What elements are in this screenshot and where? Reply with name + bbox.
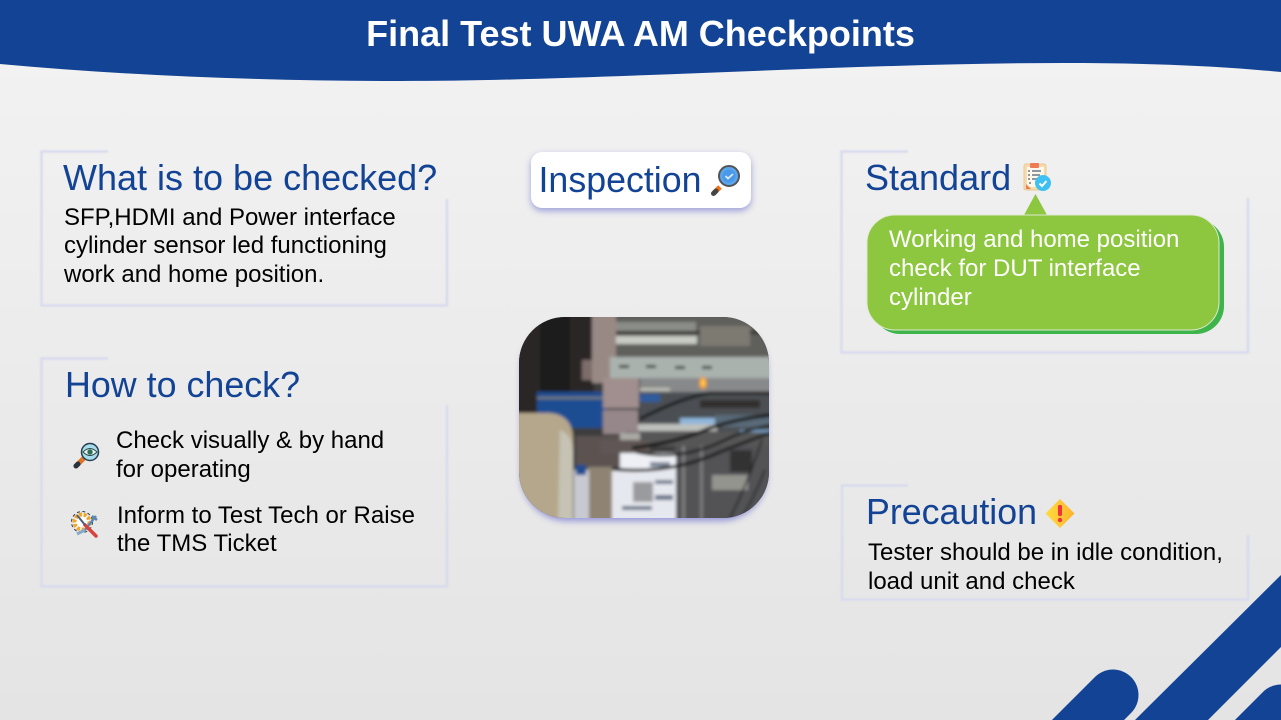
heading: inspection: Inspection: [538, 159, 702, 200]
callout: working and home position: Working and home position: [889, 226, 1179, 253]
text block: inform test tech: Inform to Test Tech or Raise: [117, 502, 415, 529]
photo: tester interface cylinder: [515, 313, 773, 522]
heading: precaution: Precaution: [866, 491, 1037, 532]
icon: clipboard check: [1024, 163, 1051, 191]
callout: working and home position: [867, 215, 1224, 334]
icon: inspection magnifier: [714, 166, 739, 194]
text block: check visually: for operating: [116, 456, 251, 483]
callout: working and home position: cylinder: [889, 284, 972, 311]
panel: precaution: [842, 486, 1248, 600]
panel: what is to be checked: [42, 152, 447, 306]
text block: check visually: Check visually & by hand: [116, 427, 384, 454]
text block: inform test tech: the TMS Ticket: [117, 530, 277, 557]
text block: precaution: Tester should be in idle condition,: [868, 539, 1223, 566]
text block: precaution: load unit and check: [868, 568, 1076, 595]
panel: inspection label: [531, 152, 751, 211]
icon: gear and tools: [72, 512, 97, 536]
heading: standard: Standard: [865, 157, 1011, 198]
text block: what is to be checked: SFP,HDMI and Power interface: [64, 204, 396, 231]
icon: warning diamond: [1046, 499, 1074, 528]
heading: what is to be checked: What is to be checked?: [63, 157, 437, 198]
text block: what is to be checked: work and home position.: [63, 261, 324, 288]
title: Final Test UWA AM Checkpoints: [366, 13, 915, 54]
callout: working and home position: check for DUT interface: [889, 255, 1141, 282]
heading: how to check: How to check?: [65, 364, 300, 405]
callout pointer: [1024, 194, 1047, 215]
header banner: [0, 0, 1281, 81]
panel: standard: [842, 152, 1248, 352]
text block: what is to be checked: cylinder sensor led functioning: [64, 232, 387, 259]
panel: how to check: [42, 358, 447, 586]
icon: eye magnifier: [76, 444, 98, 466]
corner decoration: diagonal bands: [1060, 575, 1281, 720]
